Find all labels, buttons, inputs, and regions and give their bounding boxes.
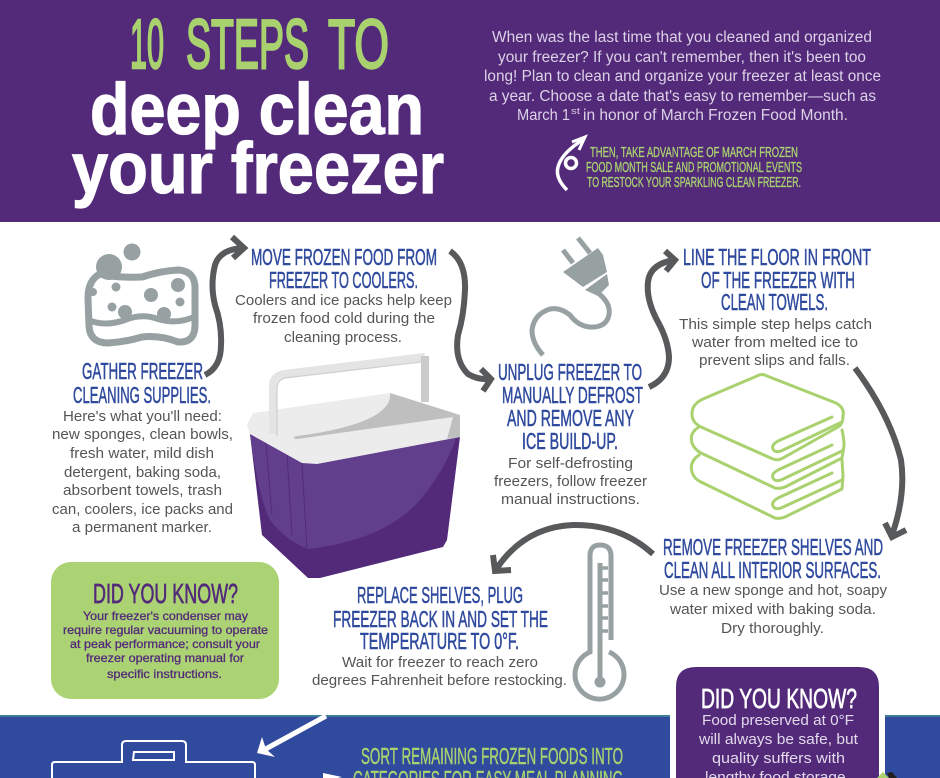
step: sort remaining foods: SORT REMAINING FROZEN FOODS INTO xyxy=(361,743,623,769)
intro text: long! Plan to clean and organize your freezer at least once xyxy=(484,68,881,85)
step: gather supplies: a permanent marker. xyxy=(72,520,212,536)
arrow: move to unplug xyxy=(450,251,491,391)
panel: blue band xyxy=(0,715,940,778)
step: line the floor: This simple step helps catch xyxy=(679,317,872,333)
intro text: When was the last time that you cleaned and organized xyxy=(492,29,872,46)
panel: did you know purple: quality suffers with xyxy=(712,751,845,767)
step: gather supplies: fresh water, mild dish xyxy=(70,446,214,462)
step: gather supplies: can, coolers, ice packs and xyxy=(52,502,233,518)
arrow: white into cooler xyxy=(257,716,326,757)
panel: did you know green: freezer operating manual for xyxy=(86,651,244,665)
step: unplug freezer: MANUALLY DEFROST xyxy=(502,382,643,408)
panel: did you know purple: DID YOU KNOW? xyxy=(701,683,857,714)
callout: restock note: THEN, TAKE ADVANTAGE OF MARCH FROZEN xyxy=(590,145,798,161)
intro text: st xyxy=(571,106,581,116)
panel: purple header xyxy=(0,0,940,222)
step: unplug freezer: ICE BUILD-UP. xyxy=(522,428,618,454)
step: unplug freezer: freezers, follow freezer xyxy=(494,474,647,490)
step: move food to coolers: frozen food cold during the xyxy=(253,311,435,327)
panel: did you know green: DID YOU KNOW? xyxy=(93,578,238,609)
arrow: remove to replace xyxy=(493,525,653,571)
callout: restock note: FOOD MONTH SALE AND PROMOTIONAL EVENTS xyxy=(586,160,802,176)
icon: sponge xyxy=(88,244,196,343)
step: remove shelves xyxy=(659,534,888,637)
step: replace shelves: TEMPERATURE TO 0°F. xyxy=(360,628,519,654)
arrow: white second arrow xyxy=(323,773,342,778)
step: replace shelves: REPLACE SHELVES, PLUG xyxy=(357,582,523,608)
icon: plug xyxy=(532,238,609,355)
arrow: towels to remove shelves xyxy=(855,368,906,537)
step: replace shelves: Wait for freezer to reach zero xyxy=(342,655,538,671)
step: sort remaining foods xyxy=(353,743,623,778)
icon: cropped corner shape xyxy=(877,772,897,778)
panel: did you know purple: will always be safe, but xyxy=(698,732,858,748)
title: deep clean your freezer: your freezer xyxy=(72,129,444,209)
callout: restock note xyxy=(586,145,802,191)
callout: restock note: TO RESTOCK YOUR SPARKLING CLEAN FREEZER. xyxy=(587,175,801,191)
icon: white curly arrow xyxy=(557,137,585,190)
step: move food to coolers xyxy=(235,244,452,346)
icon: thermometer xyxy=(575,545,624,699)
title: 10 steps to: 10 xyxy=(130,5,164,83)
panel: did you know purple: Food preserved at 0°F xyxy=(702,713,854,729)
step: gather supplies: Here's what you'll need: xyxy=(63,409,222,425)
step: unplug freezer xyxy=(494,359,647,508)
arrow: unplug to towels xyxy=(648,251,675,387)
icon: purple cooler xyxy=(247,356,460,578)
intro text: your freezer? If you can't remember, then it's been too xyxy=(498,49,866,66)
step: replace shelves xyxy=(312,582,567,689)
step: move food to coolers: MOVE FROZEN FOOD FROM xyxy=(251,244,437,270)
panel: did you know green: Your freezer's condenser may xyxy=(83,609,248,623)
panel: did you know green: specific instructions. xyxy=(107,667,222,681)
panel: did you know green xyxy=(51,562,279,699)
step: unplug freezer: For self-defrosting xyxy=(508,456,633,472)
step: gather supplies: new sponges, clean bowls, xyxy=(52,427,233,443)
step: remove shelves: Dry thoroughly. xyxy=(721,621,824,637)
title: deep clean your freezer: deep clean xyxy=(90,70,424,150)
title: 10 steps to: STEPS xyxy=(186,5,309,83)
icon: cooler outline xyxy=(52,741,255,778)
step: move food to coolers: FREEZER TO COOLERS. xyxy=(269,267,418,293)
step: gather supplies xyxy=(52,358,233,536)
step: gather supplies: CLEANING SUPPLIES. xyxy=(73,382,211,408)
step: replace shelves: degrees Fahrenheit before restocking. xyxy=(312,673,567,689)
step: line the floor xyxy=(679,244,872,369)
arrow: gather to move xyxy=(205,237,244,375)
step: unplug freezer: manual instructions. xyxy=(501,492,640,508)
step: move food to coolers: cleaning process. xyxy=(284,330,402,346)
step: gather supplies: absorbent towels, trash xyxy=(63,483,222,499)
intro text: March 1 xyxy=(517,107,570,124)
step: line the floor: CLEAN TOWELS. xyxy=(721,289,828,315)
intro text xyxy=(484,29,881,124)
panel: did you know green: require regular vacuuming to operate xyxy=(63,623,268,637)
step: unplug freezer: AND REMOVE ANY xyxy=(507,405,634,431)
step: line the floor: prevent slips and falls. xyxy=(699,353,850,369)
step: unplug freezer: UNPLUG FREEZER TO xyxy=(498,359,642,385)
title: deep clean your freezer xyxy=(72,70,444,209)
intro text: a year. Choose a date that's easy to remember—such as xyxy=(489,88,876,105)
step: replace shelves: FREEZER BACK IN AND SET THE xyxy=(333,606,548,632)
panel: did you know green: at peak performance; consult your xyxy=(70,637,260,651)
step: line the floor: water from melted ice to xyxy=(691,335,858,351)
title: 10 steps to: TO xyxy=(328,5,389,83)
intro text: in honor of March Frozen Food Month. xyxy=(583,107,848,124)
step: remove shelves: Use a new sponge and hot, soapy xyxy=(659,583,888,599)
step: move food to coolers: Coolers and ice packs help keep xyxy=(235,293,452,309)
icon: towels xyxy=(691,374,844,518)
panel: did you know purple xyxy=(676,667,879,778)
step: gather supplies: GATHER FREEZER xyxy=(82,358,203,384)
step: gather supplies: detergent, baking soda, xyxy=(64,465,221,481)
step: remove shelves: water mixed with baking soda. xyxy=(669,602,876,618)
